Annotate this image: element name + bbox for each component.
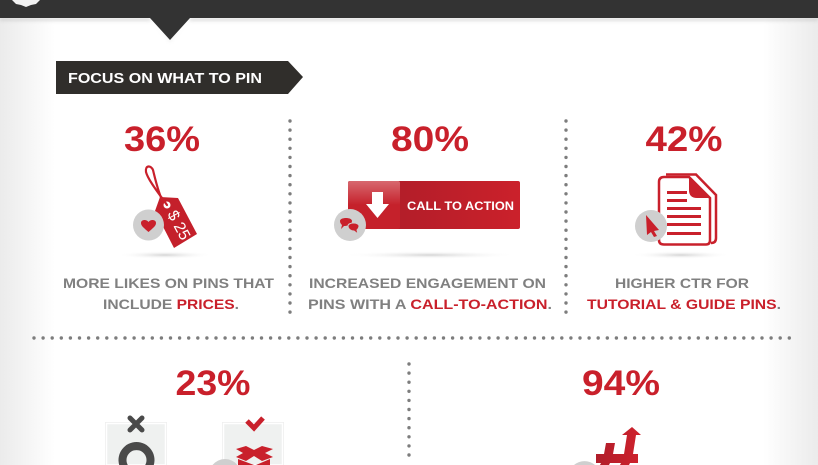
percentage: 80% [391, 120, 469, 159]
stat: 23% image comparison [105, 364, 284, 465]
section heading: focus on what to pin [56, 61, 303, 94]
icon: header logo fragment [12, 0, 40, 7]
stat: 80% call-to-action [308, 120, 552, 312]
percentage: 36% [124, 120, 200, 159]
icon: price tag with heart [117, 166, 213, 259]
icon: call to action button: CALL TO ACTION [407, 201, 514, 213]
percentage: 42% [646, 120, 722, 159]
stat: 80% call-to-action: PINS WITH A CALL-TO-ACTION . [308, 296, 552, 312]
icon: image card with person and x [105, 418, 167, 465]
percentage: 94% [582, 364, 660, 403]
dotted dividers [34, 121, 793, 463]
percentage: 23% [176, 364, 250, 403]
stat: 94% hashtag growth [574, 364, 660, 465]
stat: 42% tutorial and guide pins [587, 120, 781, 312]
icon: image card with box and check [212, 418, 284, 465]
caption: INCREASED ENGAGEMENT ON [309, 275, 546, 291]
icon: hash with rising arrow [574, 427, 641, 465]
header bar with pointer [0, 0, 818, 42]
caption: MORE LIKES ON PINS THAT [63, 275, 274, 291]
icon: price tag with heart: $ 25 [163, 208, 193, 243]
icon: document with cursor [631, 174, 731, 259]
stat: 42% tutorial and guide pins: TUTORIAL & GUIDE PINS . [587, 296, 781, 312]
stat: 36% likes on pins with prices [63, 120, 274, 312]
stat: 36% likes on pins with prices: INCLUDE PRICES . [103, 296, 239, 312]
caption: HIGHER CTR FOR [615, 275, 749, 291]
icon: call to action button [334, 181, 520, 259]
section heading: focus on what to pin: FOCUS ON WHAT TO PIN [68, 71, 262, 87]
